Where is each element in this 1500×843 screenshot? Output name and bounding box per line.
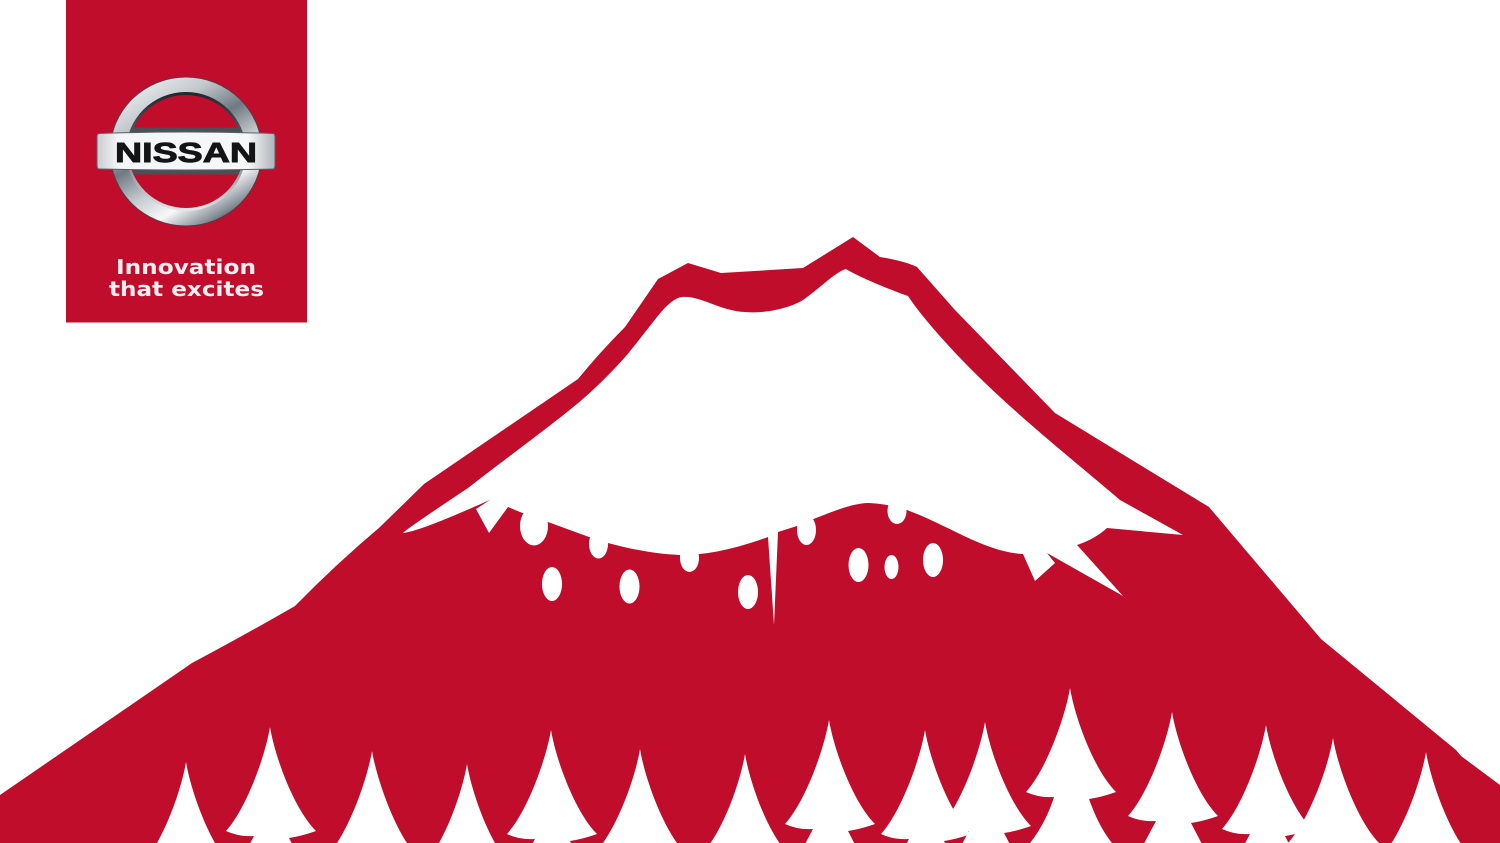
snow spots (542, 543, 943, 609)
mountain illustration (0, 237, 1500, 843)
snow drips (520, 498, 906, 572)
pine trees (157, 688, 1460, 843)
emblem bar (97, 132, 275, 170)
tagline line 1: Innovation (116, 255, 256, 279)
emblem ring (110, 76, 262, 226)
tagline line 2: that excites (109, 277, 264, 301)
snow cap (403, 269, 1183, 625)
emblem bar shadow (133, 128, 239, 174)
icon: nissan emblem (97, 76, 275, 226)
logo panel (66, 0, 307, 322)
emblem wordmark: NISSAN (115, 137, 257, 168)
mountain silhouette (0, 237, 1500, 843)
